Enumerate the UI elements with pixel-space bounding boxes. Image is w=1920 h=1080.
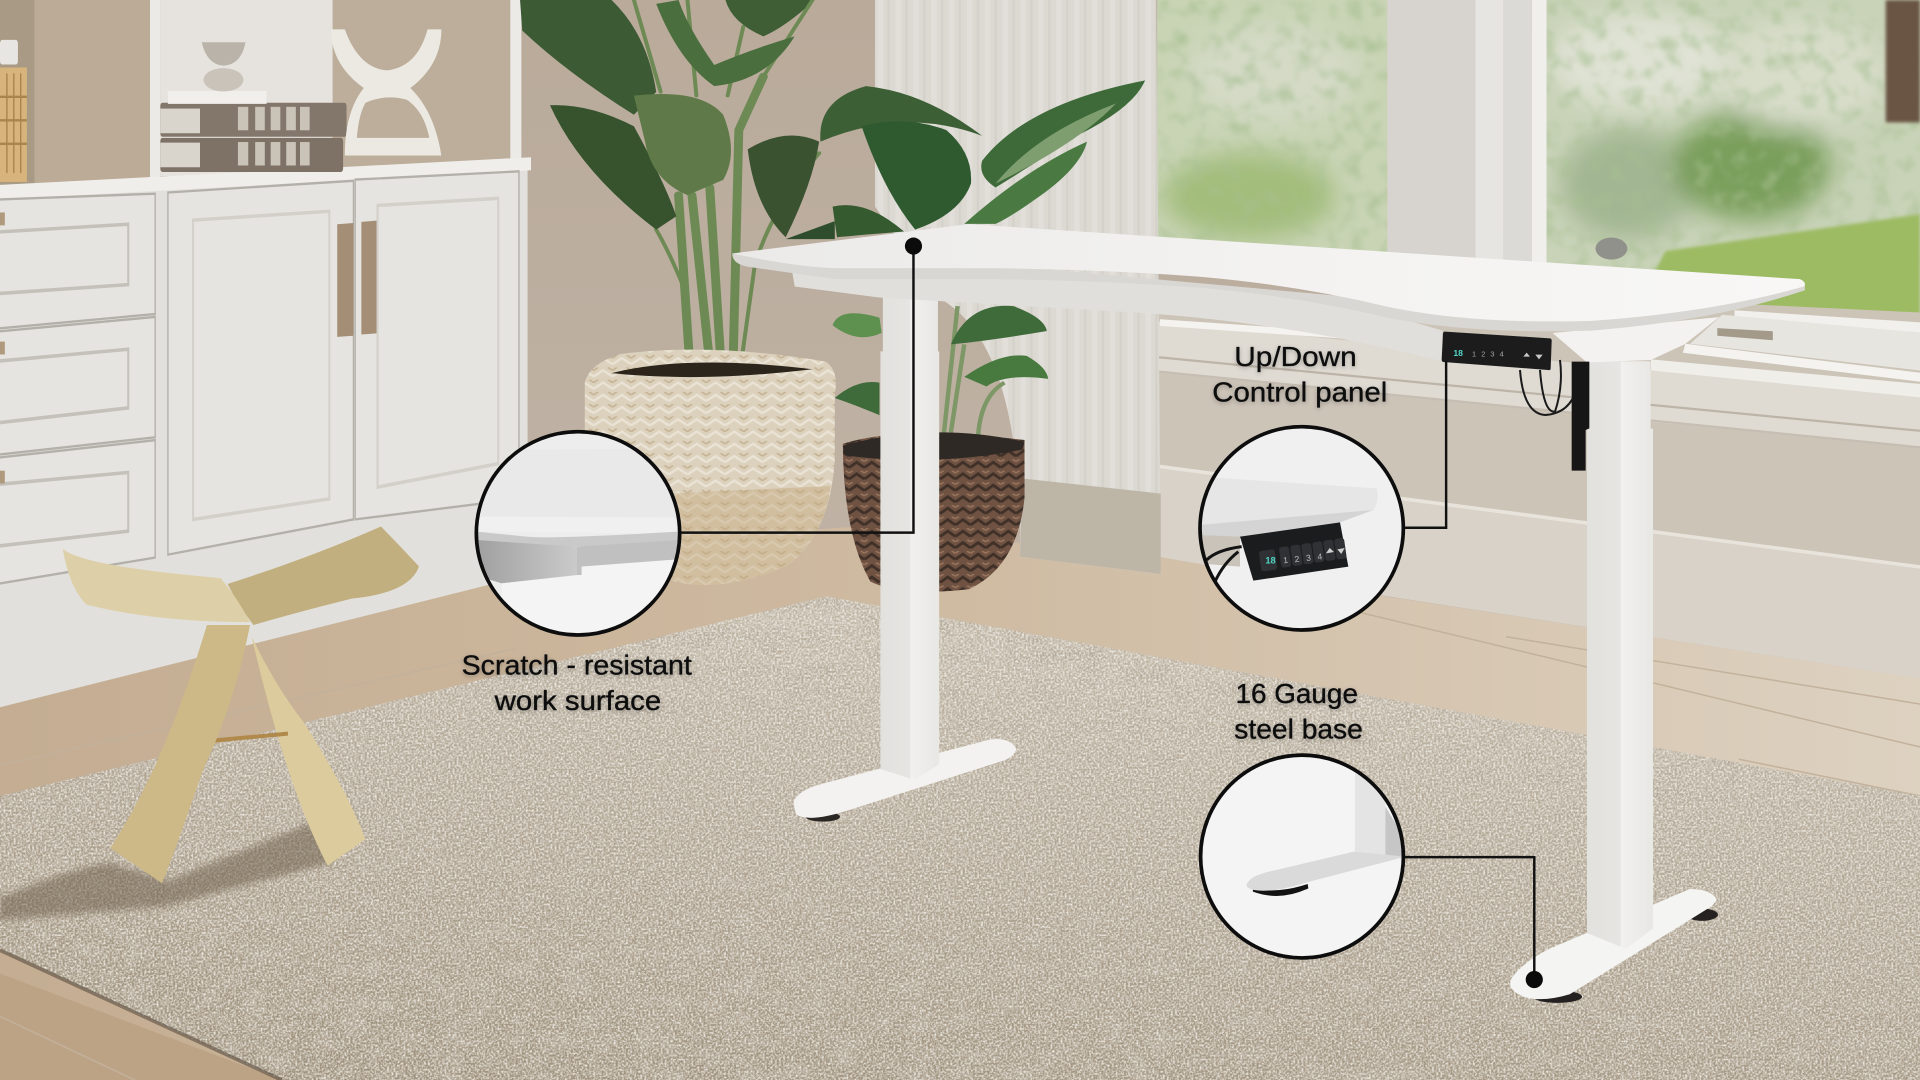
window frame and column — [1387, 0, 1547, 276]
rug — [0, 596, 1920, 1080]
basket: woven small — [843, 432, 1025, 592]
drawers — [0, 194, 155, 584]
door insets — [193, 198, 498, 519]
control panel and cables on desk: 18 — [1453, 348, 1463, 358]
rattan basket — [0, 40, 27, 182]
plant: tall bird of paradise — [520, 0, 819, 367]
label: up/down control panel: Up/Down — [1234, 341, 1357, 372]
apron — [792, 272, 1442, 361]
callout: control panel lens: 1 2 3 4 — [1283, 551, 1323, 565]
wall, moldings and window sill under the window — [1157, 304, 1920, 679]
basket: woven large — [585, 350, 836, 585]
callout: control panel lens: 18 — [1265, 555, 1276, 565]
cabinet, shelves and stool — [0, 0, 531, 920]
cabinet body — [0, 166, 528, 707]
leader line: work surface — [680, 238, 922, 533]
label: scratch-resistant work surface: work surface — [494, 685, 661, 716]
countertop — [0, 157, 531, 200]
potted plants — [520, 0, 1145, 592]
column — [1587, 361, 1653, 949]
garden seen through the windows — [1157, 0, 1920, 331]
label: up/down control panel: Control panel — [1212, 377, 1387, 408]
foot pad — [806, 812, 840, 822]
desk top — [732, 224, 1805, 362]
surface — [732, 224, 1805, 321]
label: up/down control panel — [1212, 341, 1387, 408]
foot plate — [1510, 889, 1717, 999]
cabinet doors — [168, 171, 519, 555]
label: scratch-resistant work surface: Scratch - resistant — [462, 650, 692, 681]
foot pads — [1533, 909, 1718, 1003]
callout: control panel lens — [1197, 423, 1407, 633]
desk: left leg — [793, 284, 1016, 822]
label: 16 gauge steel base: 16 Gauge — [1236, 678, 1358, 709]
leg mount — [1553, 317, 1719, 362]
desk: right leg and foot — [1510, 361, 1718, 1003]
shelf backing — [0, 0, 521, 188]
leader line: control panel — [1403, 361, 1446, 528]
plant: small bird of paradise — [786, 80, 1145, 452]
front edge — [732, 253, 1805, 331]
control panel and cables on desk: 1 2 3 4 — [1472, 350, 1504, 359]
stool — [63, 526, 419, 883]
foot plate — [793, 739, 1016, 818]
callout: steel base lens — [1199, 753, 1409, 960]
sculpture — [331, 29, 441, 156]
label: 16 gauge steel base: steel base — [1234, 713, 1363, 744]
label: scratch-resistant work surface — [462, 650, 692, 716]
bowl ornament — [168, 42, 267, 104]
floor — [0, 527, 1920, 1080]
curtain — [875, 0, 1161, 574]
leader line: steel base — [1403, 857, 1543, 988]
label: 16 gauge steel base — [1234, 678, 1363, 744]
callout: work surface lens — [473, 430, 683, 640]
drawer insets — [0, 224, 128, 546]
door handles — [337, 221, 377, 337]
stool shadow — [0, 822, 331, 920]
column — [880, 284, 939, 780]
stacked books — [160, 103, 347, 172]
control panel and cables on desk — [1442, 332, 1589, 471]
drawer pulls — [0, 212, 5, 484]
